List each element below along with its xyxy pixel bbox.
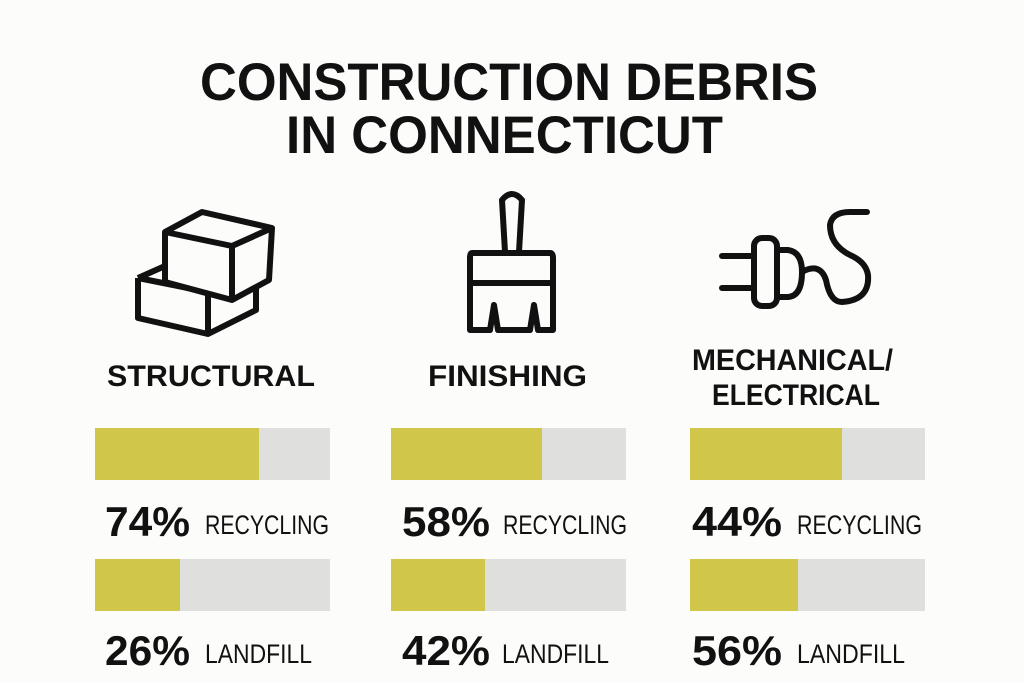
category labels: STRUCTURAL xyxy=(107,360,315,393)
percentages: LANDFILL xyxy=(205,639,312,669)
category labels: ELECTRICAL xyxy=(712,379,880,412)
percentages: 44% xyxy=(692,498,782,545)
percentages: 42% xyxy=(402,627,490,674)
percentages: RECYCLING xyxy=(503,510,627,540)
category labels: FINISHING xyxy=(428,360,587,393)
title: CONSTRUCTION DEBRIS xyxy=(200,53,818,112)
percentages: RECYCLING xyxy=(797,510,922,540)
percentages: RECYCLING xyxy=(205,510,329,540)
bars xyxy=(95,428,925,611)
percentages: LANDFILL xyxy=(502,639,609,669)
title xyxy=(200,53,818,165)
percentages: 58% xyxy=(402,498,490,545)
category labels: MECHANICAL/ xyxy=(692,344,894,377)
title: IN CONNECTICUT xyxy=(286,106,723,165)
icon: bricks xyxy=(138,212,272,334)
icon: plug xyxy=(722,212,868,306)
percentages: 26% xyxy=(105,627,190,674)
percentages: 74% xyxy=(105,498,190,545)
percentages: LANDFILL xyxy=(797,639,905,669)
category labels xyxy=(107,344,894,412)
icon: paint brush xyxy=(470,194,553,330)
percentages xyxy=(105,498,922,674)
percentages: 56% xyxy=(692,627,782,674)
